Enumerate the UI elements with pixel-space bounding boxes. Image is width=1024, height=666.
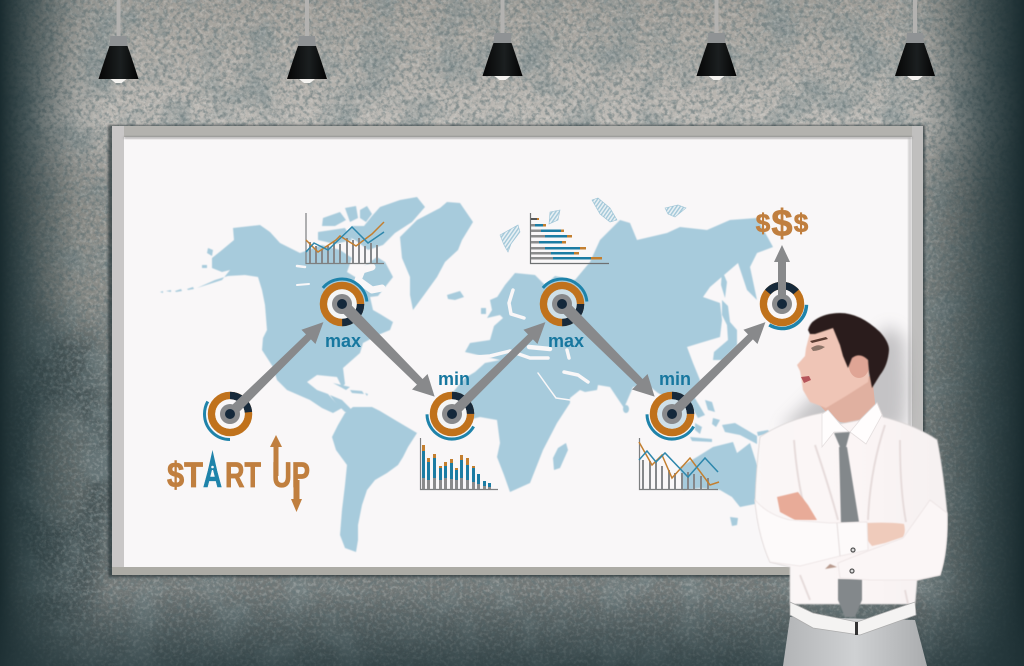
map: greenland [400,202,473,310]
line chart: asia [639,438,719,490]
dollar signs: $ [771,203,793,245]
logo: letters UP: UP [272,456,310,495]
man: face [797,325,872,408]
ring marker: max 2 [527,269,597,339]
line chart: north america [306,213,384,264]
man: hair [808,313,889,388]
man: cast shadow on board [780,325,908,430]
lamp 2 [287,0,327,83]
logo: letters $T: $T [167,456,203,495]
map: uk and ireland [481,297,500,318]
label: min 2: min [659,369,691,389]
map: australia [680,442,775,507]
man: trousers [783,617,927,666]
map: north america [197,225,393,413]
world map [160,197,775,552]
map: sakhalin [721,270,727,298]
map: madagascar [553,443,568,470]
man: belt [790,602,916,635]
dollar signs: $ [794,208,809,238]
dollar signs [756,203,809,245]
man: lower forearm and cuff [825,500,947,580]
arrow: min to max [445,315,552,421]
map: indonesia and philippines [690,400,770,444]
map: alaska islands [160,248,213,293]
man [755,313,947,666]
horizontal bar chart: europe [530,213,609,264]
ring marker: min 2 [638,380,706,448]
map: tasmania [730,517,738,526]
man: cufflinks [850,548,855,573]
map: eurasia and africa [453,218,773,492]
man: ear [849,354,869,378]
map: sri lanka [623,405,629,413]
label: min 1: min [438,369,470,389]
arrow: start to max [223,315,330,421]
arrow: finish to money [774,245,790,304]
man: upper forearm and cuff [755,500,868,566]
start up logo [167,435,310,512]
man: shirt [755,403,947,604]
man: brow [810,337,828,343]
logo: down arrow on P [291,480,302,512]
lamp 1 [98,0,138,83]
man: left hand [777,492,817,520]
map: seas and lakes [297,266,588,400]
man: right hand [867,523,905,546]
map: central america and caribbean [330,383,368,412]
label: max 1: max [325,331,361,351]
man: mouth [801,376,811,383]
map: japan [713,300,737,360]
arrow: max to min 2 [554,296,662,404]
man: collar [822,403,882,447]
stacked bar chart: africa [420,438,498,490]
map: hatched arctic islands [500,198,686,252]
arrow: max to min [334,296,442,404]
ring marker: max 1 [307,269,377,339]
man: eye [811,345,825,351]
map: canadian arctic islands [345,197,425,250]
logo: rocket A: A [203,456,222,495]
whiteboard panel frame [108,125,925,577]
logo: up arrow on U [270,435,282,476]
logo: rocket A [203,450,222,495]
man: tie [834,432,862,617]
logo: letters RT: RT [225,456,261,495]
lamp 5 [895,0,935,80]
ring marker: finish [756,278,808,330]
arrow: min to finish [665,315,772,421]
label: max 2: max [548,331,584,351]
lamp 4 [696,0,736,80]
ring hubs [220,294,792,424]
map: south america [332,407,417,552]
lamp 3 [482,0,522,80]
ring marker: start [204,388,256,440]
hanging lamps [98,0,935,83]
dollar signs: $ [756,208,771,238]
ring marker: min 1 [418,380,486,448]
man: neck [815,375,876,425]
